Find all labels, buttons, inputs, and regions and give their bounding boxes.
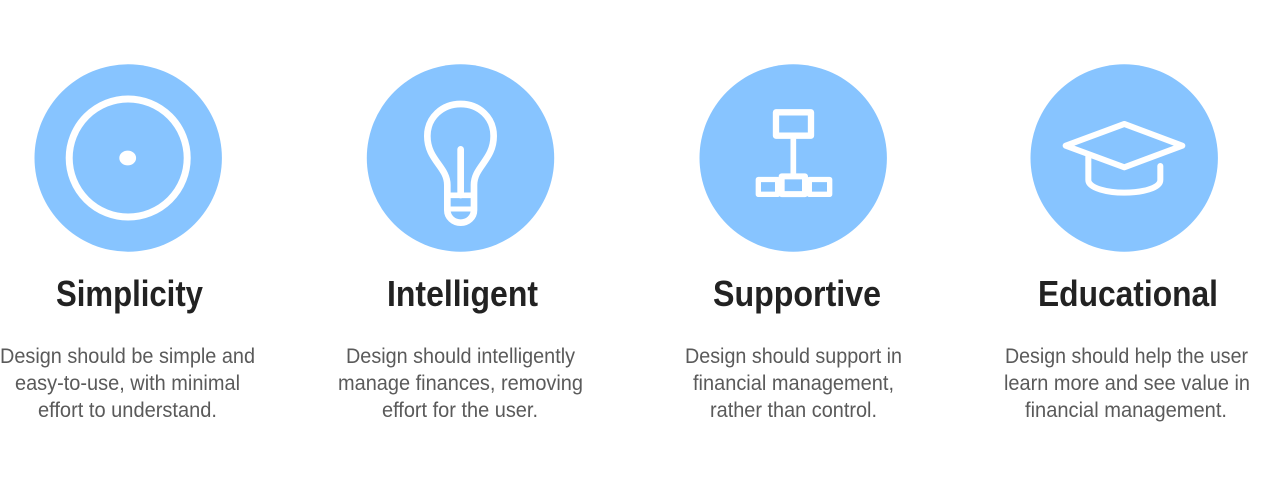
- description: effort to understand.: [38, 399, 217, 422]
- description: effort for the user.: [382, 399, 538, 422]
- icon: graduation cap: [1066, 124, 1182, 193]
- icon: light bulb: [427, 104, 494, 223]
- description: [1004, 345, 1250, 422]
- heading: Educational: [1038, 273, 1218, 314]
- panel: Intelligent: [338, 64, 583, 422]
- panel: Simplicity: [0, 64, 255, 422]
- description: Design should be simple and: [0, 345, 255, 368]
- description: [0, 345, 255, 422]
- description: easy-to-use, with minimal: [15, 372, 240, 395]
- heading: Simplicity: [56, 273, 203, 314]
- description: Design should help the user: [1005, 345, 1248, 368]
- description: [338, 345, 583, 422]
- icon: hierarchy diagram: [758, 112, 830, 194]
- description: manage finances, removing: [338, 372, 583, 395]
- panel: Supportive: [685, 64, 902, 422]
- description: rather than control.: [710, 399, 877, 422]
- circle background: [34, 64, 222, 252]
- description: Design should intelligently: [346, 345, 575, 368]
- description: financial management.: [1025, 399, 1227, 422]
- icon: ring with dot: [69, 99, 187, 217]
- circle background: [700, 64, 887, 252]
- panel: Educational: [1004, 64, 1250, 422]
- heading: Supportive: [713, 273, 881, 314]
- description: financial management,: [693, 372, 894, 395]
- heading: Intelligent: [387, 273, 538, 314]
- description: Design should support in: [685, 345, 902, 368]
- description: [685, 345, 902, 422]
- description: learn more and see value in: [1004, 372, 1250, 395]
- circle background: [367, 64, 554, 252]
- circle background: [1030, 64, 1218, 252]
